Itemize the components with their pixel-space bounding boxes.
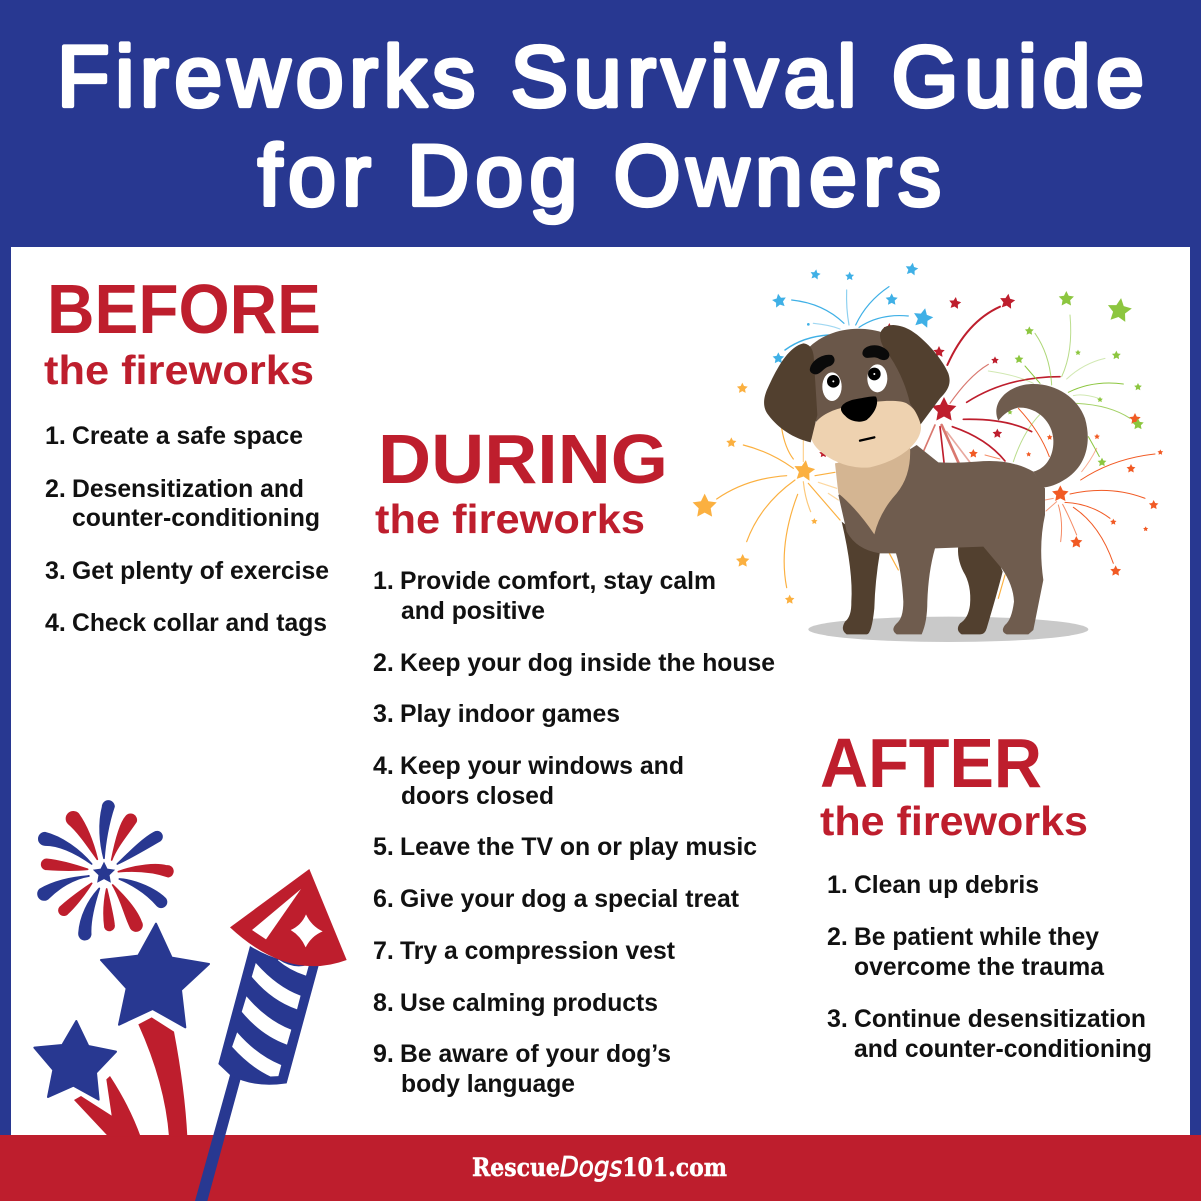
heading: during: the fireworks [375,496,645,542]
list: during steps [373,567,775,1098]
ears [764,325,950,442]
eyebrows [810,345,889,374]
chest [835,447,910,534]
list: after steps: overcome the trauma [854,953,1105,981]
footer band: RescueDogs101.com [472,1150,727,1183]
list: during steps: 1. [373,567,394,595]
list: during steps: 7. [373,937,394,965]
illustration: dog with fireworks [693,262,1163,642]
fireworks stars [693,262,1163,604]
list: after steps: Clean up debris [854,871,1039,899]
list: during steps: 2. [373,649,394,677]
list: before steps: 1. [45,422,66,450]
red star trails [74,1017,187,1137]
list: before steps: 2. [45,475,66,503]
muzzle [811,401,921,468]
illustration: rocket and stars [34,801,347,1201]
list: during steps: 3. [373,700,394,728]
list: during steps: 6. [373,885,394,913]
list: during steps: body language [401,1070,575,1098]
dog [764,325,1088,642]
list: during steps: Keep your windows and [400,752,684,780]
heading: during [375,420,668,542]
list: after steps: Continue desensitization [854,1005,1146,1033]
title [57,29,1144,224]
list: during steps: Give your dog a special treat [400,885,740,913]
rocket nose cone [230,869,347,966]
mouth [860,437,874,441]
list: after steps: and counter-conditioning [854,1035,1152,1063]
fireworks rays [717,287,1155,598]
burst firework [38,801,173,940]
panel: after [820,724,1152,1063]
head [805,329,920,425]
far legs [842,522,1003,634]
heading: after: the fireworks [820,798,1088,844]
rocket body [218,946,319,1085]
list: during steps: and positive [401,597,545,625]
list: during steps: Provide comfort, stay calm [400,567,716,595]
list: during steps: 5. [373,833,394,861]
eyes [822,364,887,401]
title: Fireworks Survival Guide [57,29,1144,125]
title: for Dog Owners [258,128,941,224]
list: during steps: Leave the TV on or play music [400,833,757,861]
body and tail [838,384,1088,634]
white content panel [11,247,1190,1137]
heading: after: AFTER [820,724,1042,802]
rocket stick [195,1067,243,1201]
list: after steps: 2. [827,923,848,951]
heading: during: DURING [378,420,668,498]
list: during steps: Try a compression vest [400,937,676,965]
list: after steps [827,871,1152,1063]
list: after steps: Be patient while they [854,923,1099,951]
heading: before: the fireworks [44,347,314,393]
list: before steps: 4. [45,609,66,637]
list: during steps: Keep your dog inside the house [400,649,775,677]
list: after steps: 3. [827,1005,848,1033]
list: before steps: Get plenty of exercise [72,557,329,585]
list: during steps: 4. [373,752,394,780]
list: during steps: doors closed [401,782,554,810]
ground shadow [808,617,1088,642]
panel: before [44,270,329,637]
list: before steps [45,422,329,637]
list: during steps: 8. [373,989,394,1017]
list: before steps: Desensitization and [72,475,304,503]
footer band [0,1135,1201,1201]
blue stars [34,924,209,1100]
list: before steps: Create a safe space [72,422,303,450]
heading: after [820,724,1088,844]
list: during steps: Play indoor games [400,700,620,728]
list: after steps: 1. [827,871,848,899]
list: before steps: counter-conditioning [72,504,320,532]
list: during steps: 9. [373,1040,394,1068]
heading: before: BEFORE [47,270,321,348]
panel: during [373,420,775,1098]
heading: before [44,270,321,393]
list: before steps: Check collar and tags [72,609,327,637]
list: during steps: Be aware of your dog’s [400,1040,671,1068]
list: during steps: Use calming products [400,989,658,1017]
list: before steps: 3. [45,557,66,585]
nose [841,396,877,422]
